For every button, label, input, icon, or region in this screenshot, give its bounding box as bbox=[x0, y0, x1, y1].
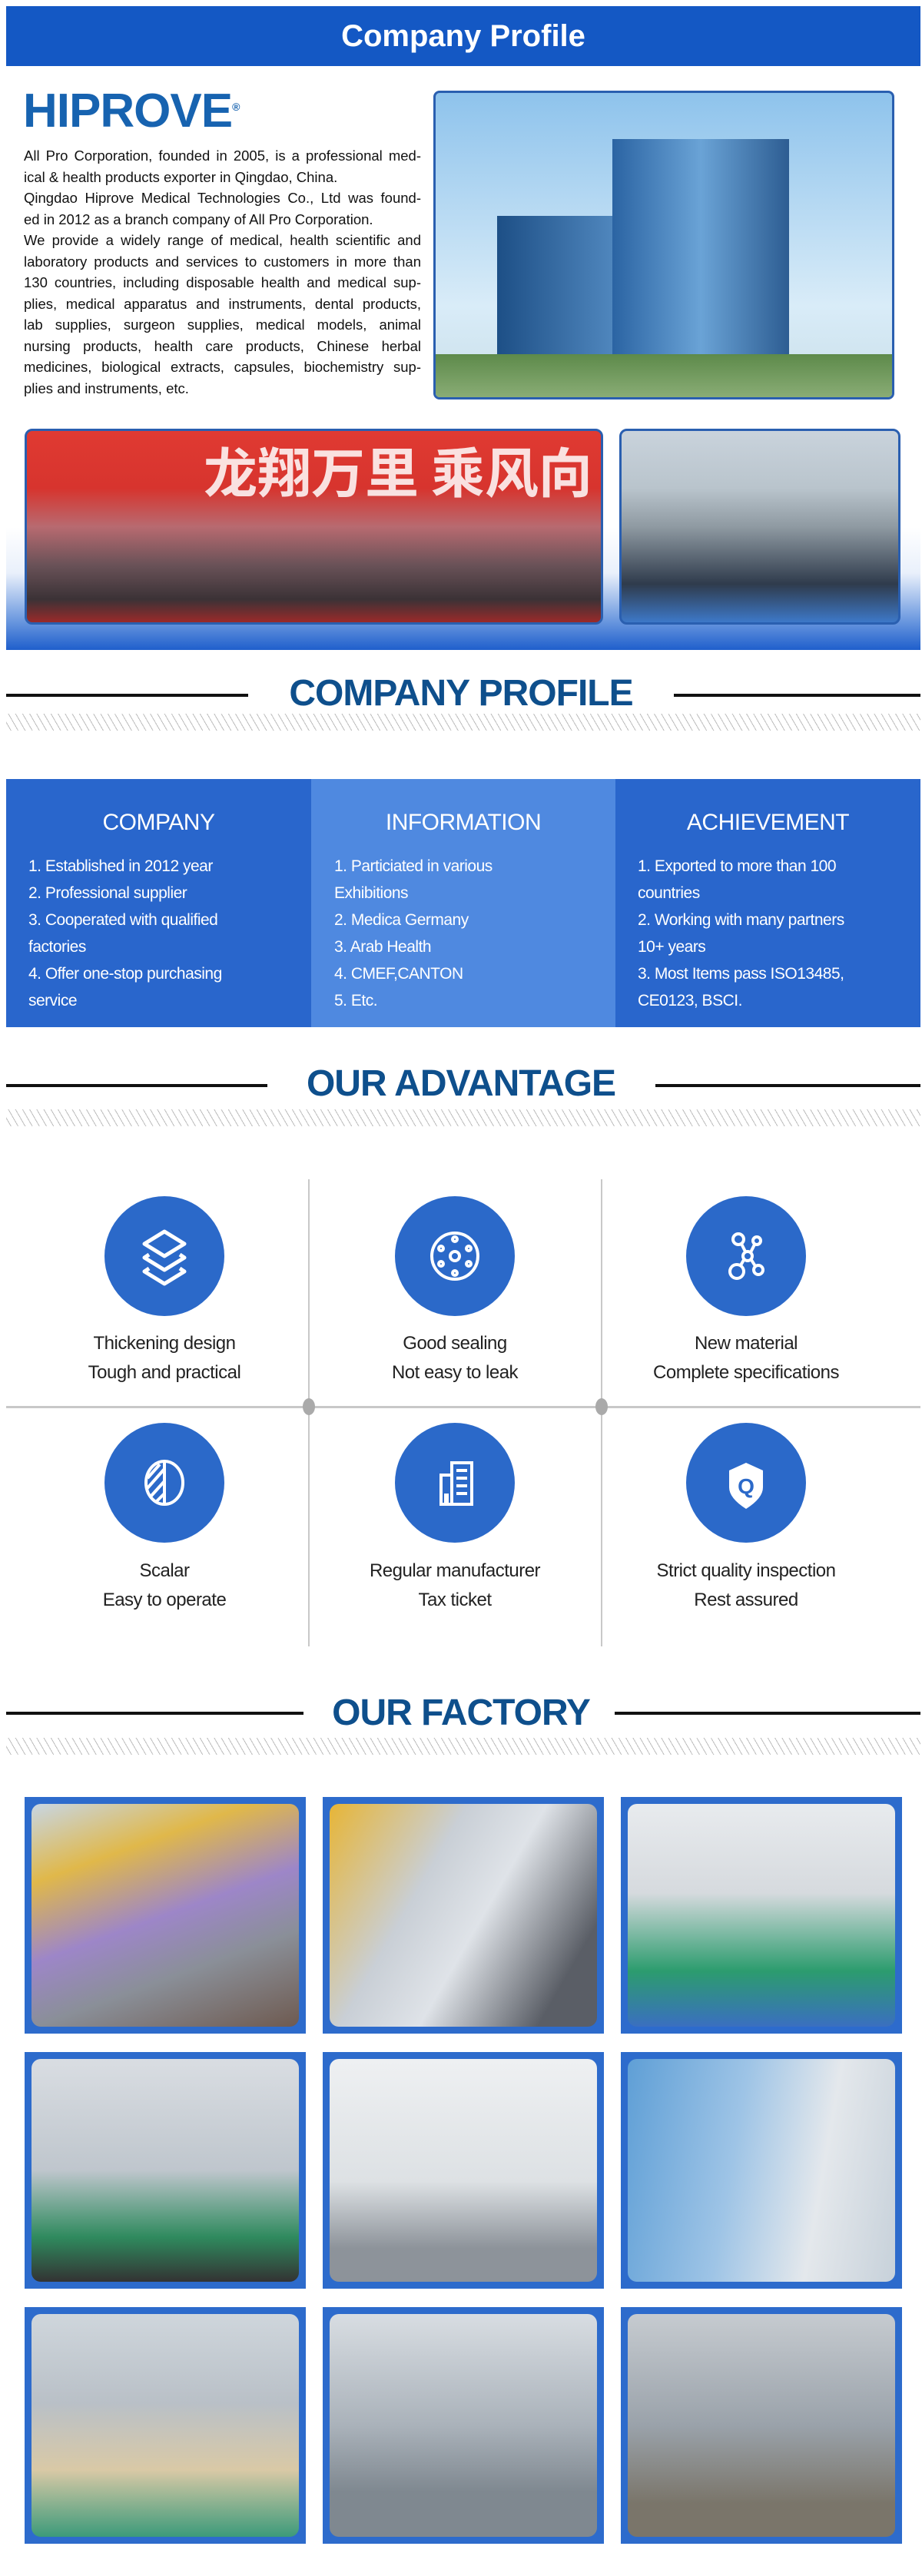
intro text bbox=[24, 148, 421, 396]
icon: layers bbox=[104, 1196, 224, 1316]
intro text: nursing products, health care products, Chinese herbal bbox=[24, 338, 421, 353]
intro text: plies, medical apparatus and instruments, dental products, bbox=[24, 295, 421, 312]
intro text: ical & health products exporter in Qingdao, China. bbox=[24, 169, 337, 184]
text: scalar: Easy to operate bbox=[103, 1590, 226, 1610]
intro text: medicines, biological extracts, capsules, biochemistry sup- bbox=[24, 359, 421, 375]
text: manufacturer: Regular manufacturer bbox=[370, 1560, 540, 1581]
panel: company: 2. Professional supplier bbox=[28, 884, 187, 902]
intro text: We provide a widely range of medical, health scientific and bbox=[24, 232, 421, 248]
text: manufacturer bbox=[370, 1560, 541, 1610]
header bar bbox=[6, 6, 920, 66]
panel: information: 1. Particiated in various bbox=[334, 857, 493, 875]
advantage grid bbox=[6, 1179, 920, 1646]
panel: achievement: countries bbox=[638, 884, 700, 902]
section heading: our factory: OUR FACTORY bbox=[332, 1692, 590, 1733]
intro text: All Pro Corporation, founded in 2005, is a professional med- bbox=[24, 148, 421, 164]
intro text: lab supplies, surgeon supplies, medical models, animal bbox=[24, 317, 421, 333]
panel: company: 1. Established in 2012 year bbox=[28, 857, 213, 875]
text: material: Complete specifications bbox=[653, 1362, 839, 1383]
panel: achievement: 3. Most Items pass ISO13485, bbox=[638, 965, 844, 983]
text: manufacturer: Tax ticket bbox=[418, 1590, 492, 1610]
logo: HIPROVE: HIPROVE® bbox=[23, 85, 239, 138]
photo: team group bbox=[25, 429, 603, 625]
section heading: company profile bbox=[6, 673, 920, 731]
panel: company: COMPANY bbox=[103, 810, 214, 835]
text: quality: Strict quality inspection bbox=[657, 1560, 835, 1581]
text: thickening: Thickening design bbox=[94, 1333, 235, 1354]
section heading: our advantage: OUR ADVANTAGE bbox=[307, 1063, 615, 1104]
photo: office building bbox=[433, 91, 894, 399]
panel: achievement: 2. Working with many partners bbox=[638, 911, 844, 929]
panel: company: service bbox=[28, 992, 77, 1010]
panel: achievement: 1. Exported to more than 100 bbox=[638, 857, 836, 875]
panel: company: 3. Cooperated with qualified bbox=[28, 911, 217, 929]
factory photo grid bbox=[25, 1797, 902, 2544]
text: sealing bbox=[392, 1333, 518, 1383]
intro text: laboratory products and services to customers in more than bbox=[24, 254, 421, 269]
panel: company bbox=[6, 779, 311, 1027]
panel: achievement: CE0123, BSCI. bbox=[638, 992, 742, 1010]
icon: quality shield: Q bbox=[738, 1474, 755, 1498]
icon: quality shield bbox=[686, 1423, 806, 1543]
intro text: ed in 2012 as a branch company of All Pro Corporation. bbox=[24, 211, 373, 227]
photo: team group: 龙翔万里 乘风向 bbox=[204, 431, 592, 509]
text: scalar bbox=[103, 1560, 226, 1610]
intro text: plies and instruments, etc. bbox=[24, 380, 189, 396]
panel: information: 2. Medica Germany bbox=[334, 911, 469, 929]
icon: sealing bbox=[395, 1196, 515, 1316]
section heading: company profile: COMPANY PROFILE bbox=[289, 673, 633, 714]
panel: company: 4. Offer one-stop purchasing bbox=[28, 965, 222, 983]
text: material bbox=[653, 1333, 839, 1383]
text: sealing: Good sealing bbox=[403, 1333, 507, 1354]
text: sealing: Not easy to leak bbox=[392, 1362, 518, 1383]
intro text: Qingdao Hiprove Medical Technologies Co., Ltd was found- bbox=[24, 190, 421, 206]
section heading: our factory bbox=[6, 1692, 920, 1755]
section heading: our advantage bbox=[6, 1063, 920, 1126]
text: quality bbox=[657, 1560, 835, 1610]
text: thickening: Tough and practical bbox=[88, 1362, 240, 1383]
text: thickening bbox=[88, 1333, 240, 1383]
icon: building bbox=[395, 1423, 515, 1543]
panel: information: Exhibitions bbox=[334, 884, 408, 902]
header bar: Company Profile bbox=[341, 19, 585, 53]
panel: information: 3. Arab Health bbox=[334, 938, 431, 956]
panel: achievement bbox=[615, 779, 920, 1027]
photo: exhibition team bbox=[619, 429, 900, 625]
panel: information: 4. CMEF,CANTON bbox=[334, 965, 463, 983]
panel: achievement: ACHIEVEMENT bbox=[687, 810, 849, 835]
panel: information: 5. Etc. bbox=[334, 992, 377, 1010]
text: scalar: Scalar bbox=[139, 1560, 190, 1581]
intro text: 130 countries, including disposable health and medical sup- bbox=[24, 274, 421, 290]
icon: scalar bbox=[104, 1423, 224, 1543]
text: material: New material bbox=[695, 1333, 798, 1354]
icon: material bbox=[686, 1196, 806, 1316]
panel: company: factories bbox=[28, 938, 86, 956]
panel: achievement: 10+ years bbox=[638, 938, 705, 956]
panel: information bbox=[311, 779, 615, 1027]
text: quality: Rest assured bbox=[694, 1590, 798, 1610]
intro panel bbox=[6, 66, 920, 650]
panel: information: INFORMATION bbox=[386, 810, 541, 835]
